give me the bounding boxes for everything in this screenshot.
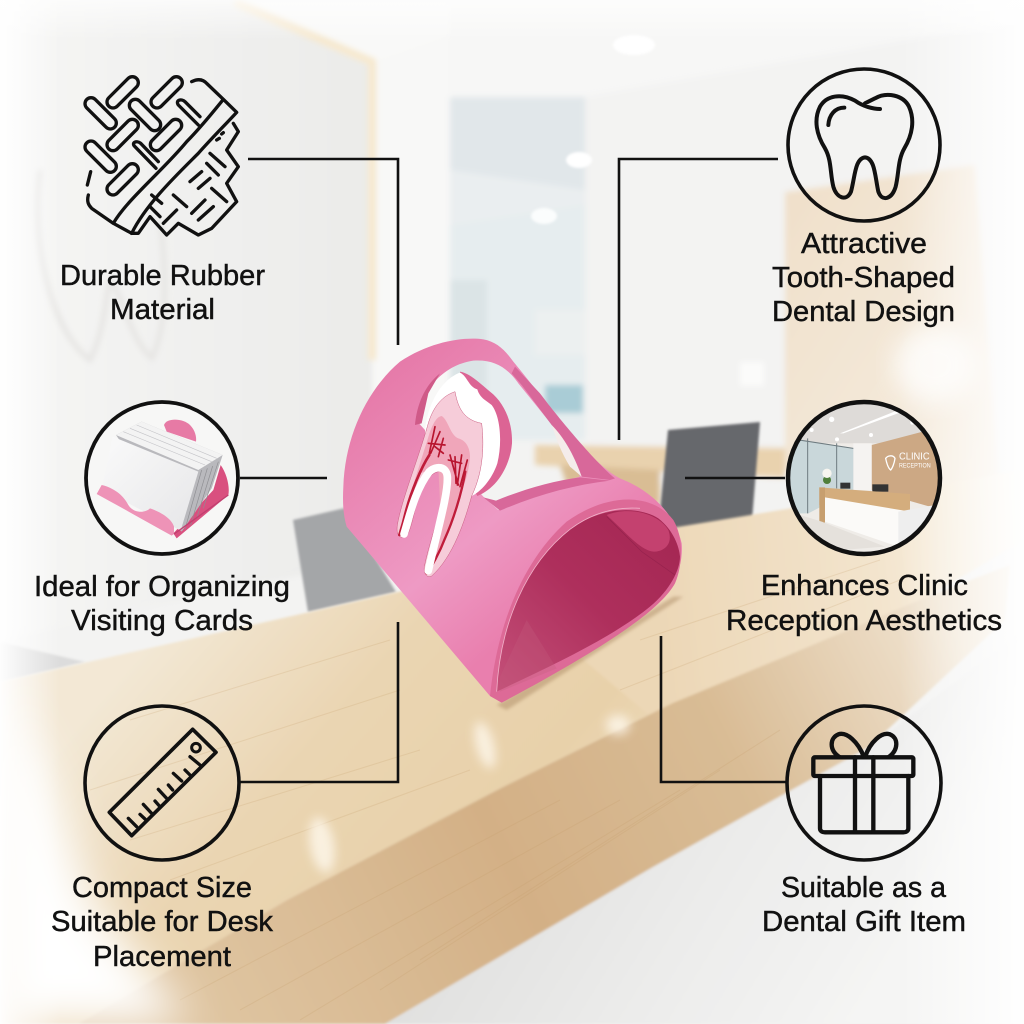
white flower bbox=[893, 327, 977, 403]
pulp chamber bbox=[402, 416, 470, 573]
label: attractive tooth-shaped dental design bbox=[772, 228, 955, 328]
holder right wall bbox=[173, 465, 229, 538]
rim of front opening bbox=[490, 500, 681, 703]
label: enhances clinic reception aesthetics bbox=[726, 570, 1002, 637]
label: enhances clinic reception aesthetics: Enhances Clinic bbox=[761, 570, 968, 602]
connector lines bbox=[240, 159, 787, 782]
label: attractive tooth-shaped dental design: Tooth-Shaped bbox=[772, 262, 955, 294]
inner flap bbox=[607, 511, 670, 552]
pulp nerves bbox=[428, 427, 467, 487]
label: suitable as a dental gift item bbox=[762, 872, 966, 938]
label: compact size suitable for desk placement: Placement bbox=[93, 941, 231, 973]
white arch band between roots bbox=[404, 468, 447, 571]
icon: clinic reception photo: RECEPTION bbox=[899, 462, 931, 469]
icon: business cards in pink holder bbox=[86, 402, 238, 554]
icon: durable rubber material bbox=[83, 74, 238, 235]
label: enhances clinic reception aesthetics: Reception Aesthetics bbox=[726, 605, 1002, 637]
left wall and column bbox=[0, 0, 372, 640]
rubber band and mesh outline bbox=[87, 80, 237, 233]
label: compact size suitable for desk placement: Suitable for Desk bbox=[51, 906, 274, 938]
ceiling lights bbox=[531, 35, 655, 224]
root canals bbox=[399, 455, 465, 573]
rubber pills bbox=[83, 74, 200, 197]
left wall faint tooth shadow bbox=[37, 170, 165, 360]
holder body with window bbox=[343, 339, 682, 703]
product: pink tooth card holder bbox=[343, 339, 683, 710]
crown enamel bbox=[425, 373, 500, 496]
label: durable rubber material: Durable Rubber bbox=[60, 260, 265, 292]
label: attractive tooth-shaped dental design: Attractive bbox=[801, 228, 927, 260]
tooth thickness bbox=[457, 372, 512, 496]
drop shadow bbox=[497, 597, 683, 710]
inner far wall of window bbox=[512, 367, 615, 480]
right wall bbox=[585, 20, 1024, 500]
edge fades bbox=[0, 0, 60, 1024]
label: ideal for organizing visiting cards bbox=[34, 571, 290, 637]
holder back tab bbox=[164, 420, 196, 442]
wood grain bbox=[90, 560, 900, 1020]
left window inner edge bbox=[415, 373, 440, 425]
monitor and chair bbox=[658, 422, 760, 532]
label: durable rubber material: Material bbox=[110, 294, 215, 326]
card stack bbox=[116, 422, 223, 532]
dentin and roots bbox=[397, 392, 483, 577]
background wood counter bbox=[0, 470, 1024, 1024]
label: compact size suitable for desk placement bbox=[51, 872, 274, 973]
label: durable rubber material bbox=[60, 260, 265, 326]
window lower ledge bbox=[483, 477, 610, 511]
inner cavity bbox=[497, 510, 680, 692]
label: suitable as a dental gift item: Suitable as a bbox=[781, 872, 947, 904]
holder front lip bbox=[97, 485, 174, 536]
tooth emblem bbox=[397, 372, 512, 577]
wood panel bbox=[785, 165, 1000, 490]
icon: ruler in circle bbox=[85, 706, 239, 860]
rear desk bbox=[535, 445, 785, 478]
label: attractive tooth-shaped dental design: Dental Design bbox=[772, 296, 955, 328]
icon: gift box in circle bbox=[787, 706, 941, 860]
icon: tooth in circle bbox=[788, 69, 940, 221]
corridor bbox=[450, 97, 585, 440]
label: suitable as a dental gift item: Dental Gift Item bbox=[762, 906, 966, 938]
label: compact size suitable for desk placement: Compact Size bbox=[72, 872, 252, 904]
label: ideal for organizing visiting cards: Ideal for Organizing bbox=[34, 571, 290, 603]
labels bbox=[34, 228, 1002, 973]
cove light bbox=[235, 2, 372, 360]
icon: clinic reception photo: CLINIC bbox=[899, 451, 930, 462]
label: ideal for organizing visiting cards: Visiting Cards bbox=[71, 605, 253, 637]
counter highlights bbox=[305, 715, 630, 875]
icon: clinic reception photo bbox=[786, 400, 942, 556]
ceiling bbox=[450, 0, 1024, 97]
